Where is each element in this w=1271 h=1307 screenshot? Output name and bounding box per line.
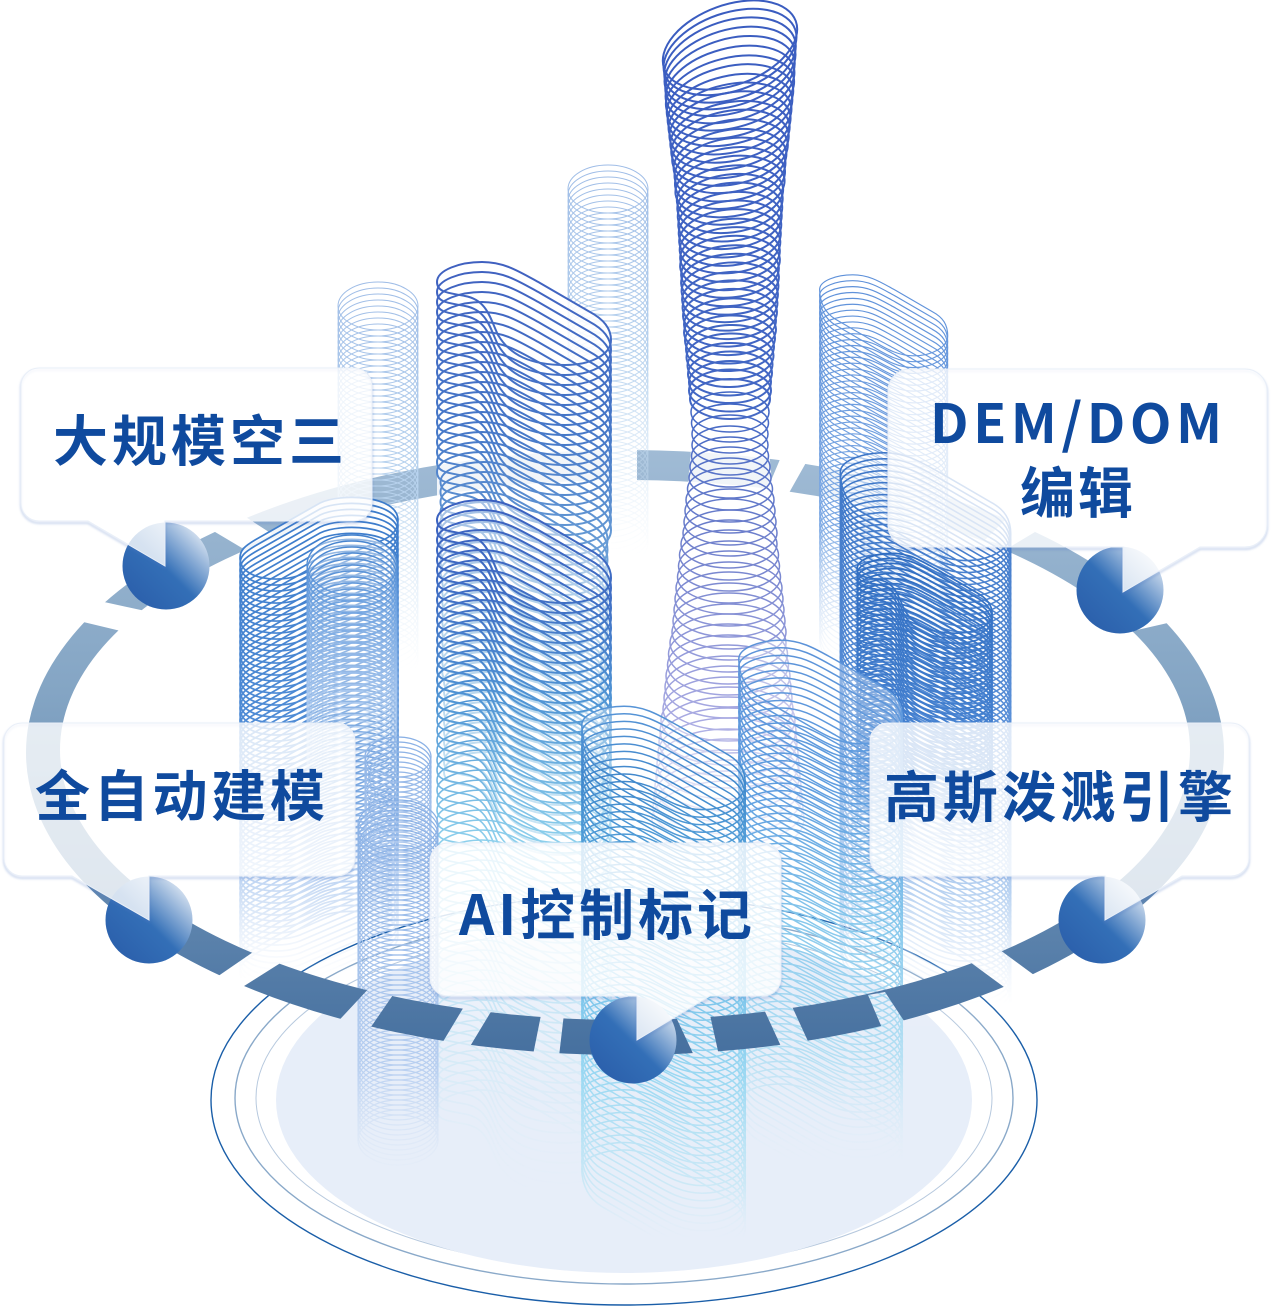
- tower: right inner block: [856, 552, 993, 840]
- tower: left inner cylinder: [306, 534, 398, 810]
- marker: DEM/DOM 编辑: [1076, 546, 1164, 634]
- callout: 全自动建模: [4, 723, 355, 922]
- marker: 高斯泼溅引擎: [1058, 876, 1146, 964]
- marker: 全自动建模: [106, 876, 192, 964]
- callout: AI控制标记: [430, 843, 781, 1042]
- tower: far right block: [819, 274, 948, 646]
- dashed ring: back half: [35, 450, 1215, 700]
- tower: small cylinder: [364, 736, 432, 908]
- callout: 大规模空三: 大规模空三: [53, 397, 344, 477]
- callout: DEM/DOM 编辑: DEM/DOM: [930, 380, 1222, 459]
- marker: AI控制标记: [590, 996, 676, 1084]
- marker: 大规模空三: [122, 522, 210, 610]
- tower: right block: [840, 452, 1012, 1017]
- tower: front left cylinder: [357, 799, 439, 1144]
- callout: 高斯泼溅引擎: 高斯泼溅引擎: [884, 753, 1233, 833]
- callout: DEM/DOM 编辑: [888, 369, 1267, 594]
- tower: tall waisted tower: [651, 0, 805, 848]
- tower: center upper block: [436, 261, 612, 856]
- tower: center lower block: [436, 499, 612, 1114]
- callout: DEM/DOM 编辑: 编辑: [1020, 449, 1133, 529]
- tower: far left cylinder: [338, 282, 418, 636]
- tower: left block: [239, 496, 399, 970]
- callout: 全自动建模: 全自动建模: [35, 752, 325, 832]
- tower: far center cylinder: [568, 164, 648, 521]
- dashed ring: front half: [26, 700, 1224, 1054]
- base platform disc: [211, 895, 1037, 1305]
- tower: front right block: [738, 640, 904, 1126]
- callout: AI控制标记: AI控制标记: [458, 871, 752, 951]
- callout: 大规模空三: [21, 368, 372, 568]
- tower: front center block: [581, 706, 746, 1216]
- callout: 高斯泼溅引擎: [870, 723, 1249, 922]
